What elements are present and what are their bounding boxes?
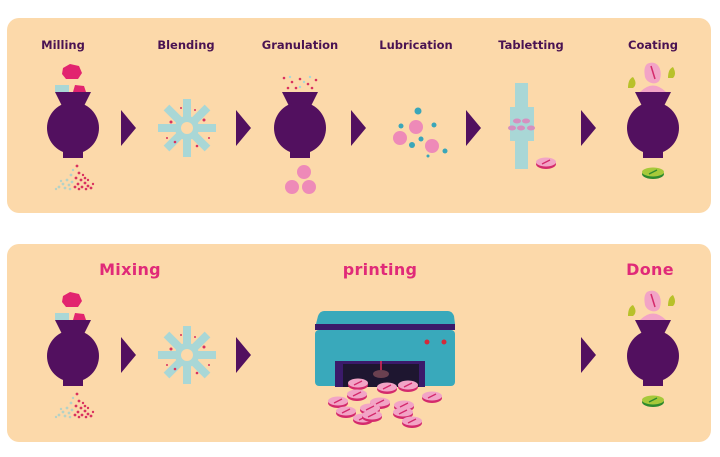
icon: blending flake (158, 99, 216, 157)
heading: Lubrication: Lubrication (379, 38, 453, 52)
icon: mixing vase (47, 292, 99, 418)
arrow (236, 110, 251, 146)
panel: 3D printing process (7, 244, 711, 442)
icon: printer (315, 311, 455, 428)
heading: Tabletting: Tabletting (498, 38, 564, 52)
arrow (121, 337, 136, 373)
arrow (351, 110, 366, 146)
arrow (581, 337, 596, 373)
icon: done vase (627, 291, 679, 407)
heading: Done: Done (626, 260, 674, 279)
icon: milling vase (47, 64, 99, 190)
heading: Milling: Milling (41, 38, 85, 52)
arrow (466, 110, 481, 146)
heading: Granulation: Granulation (262, 38, 338, 52)
icon: granulation vase (274, 76, 326, 194)
arrow (121, 110, 136, 146)
icon: lubrication dots (393, 108, 448, 158)
icon: coating vase (627, 63, 679, 179)
arrow (581, 110, 596, 146)
heading: Blending: Blending (157, 38, 215, 52)
icon: tabletting press (508, 83, 556, 169)
panel: traditional process (7, 18, 711, 213)
heading: Coating: Coating (628, 38, 678, 52)
icon: mixing flake (158, 326, 216, 384)
heading: Printing: printing (343, 260, 417, 279)
arrow (236, 337, 251, 373)
heading: Mixing: Mixing (99, 260, 161, 279)
